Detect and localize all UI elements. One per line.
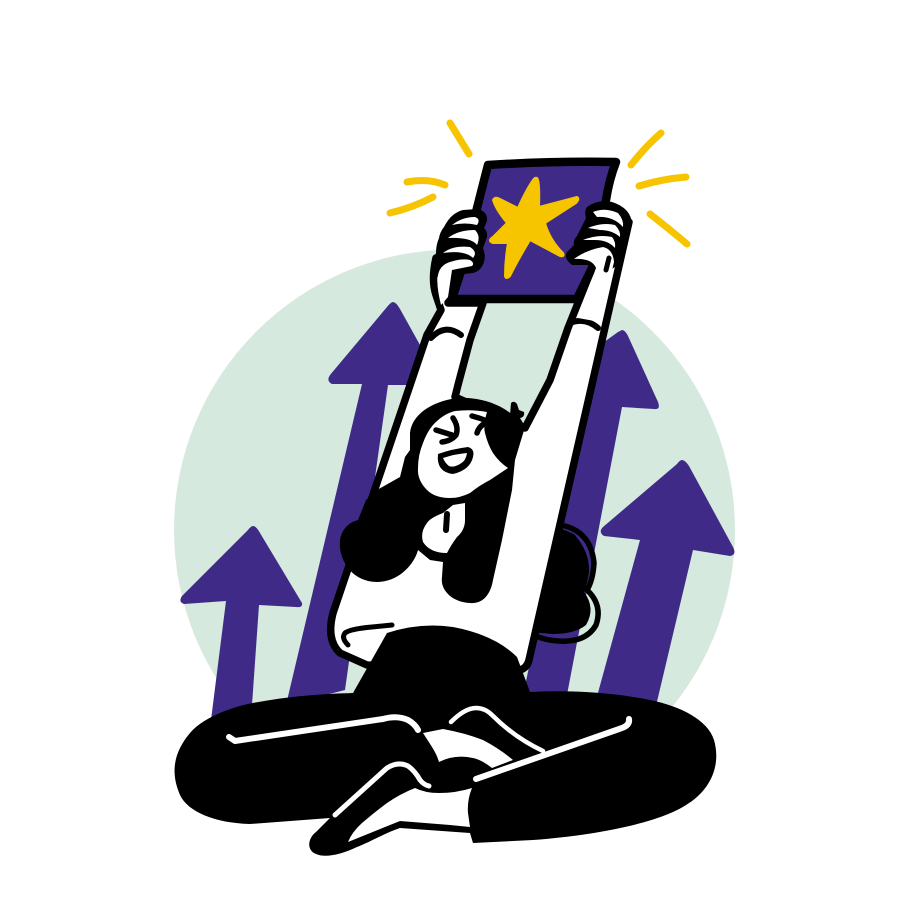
arrow: left bbox=[180, 526, 302, 720]
sleeve cuffs bbox=[431, 321, 598, 338]
ray: right lower bbox=[650, 214, 687, 244]
growth arrows bbox=[180, 302, 734, 720]
star bbox=[490, 178, 578, 278]
hair behind body: right curls bbox=[530, 526, 598, 641]
mouth bbox=[438, 447, 473, 474]
shirt hem curl bbox=[344, 625, 392, 645]
eyes and brow bbox=[436, 416, 487, 442]
inner leg gap lower bbox=[348, 788, 472, 842]
necklace line bbox=[446, 514, 447, 530]
hand: left bbox=[431, 209, 487, 305]
ray: right upper bbox=[639, 177, 686, 186]
ray: top right bbox=[631, 133, 661, 165]
ray: left upper bbox=[407, 181, 445, 185]
hand: right bbox=[566, 201, 632, 322]
hair: front mass bbox=[340, 398, 525, 603]
sparkle rays bbox=[390, 123, 687, 244]
ray: left lower bbox=[390, 197, 433, 213]
hair tuft bbox=[510, 402, 526, 428]
neck and chest bbox=[422, 503, 465, 553]
ray: top left bbox=[450, 123, 469, 154]
trouser fold lines bbox=[229, 708, 629, 815]
arrow: middle bbox=[286, 302, 420, 705]
face bbox=[418, 410, 508, 498]
star card bbox=[452, 162, 616, 299]
background circle bbox=[174, 250, 735, 810]
inner leg gap upper bbox=[423, 729, 513, 768]
trousers: hips and crossed legs bbox=[175, 625, 716, 856]
arrow: right middle bbox=[522, 330, 659, 700]
arrow: right bbox=[596, 460, 734, 710]
body and raised arms bbox=[331, 222, 629, 670]
